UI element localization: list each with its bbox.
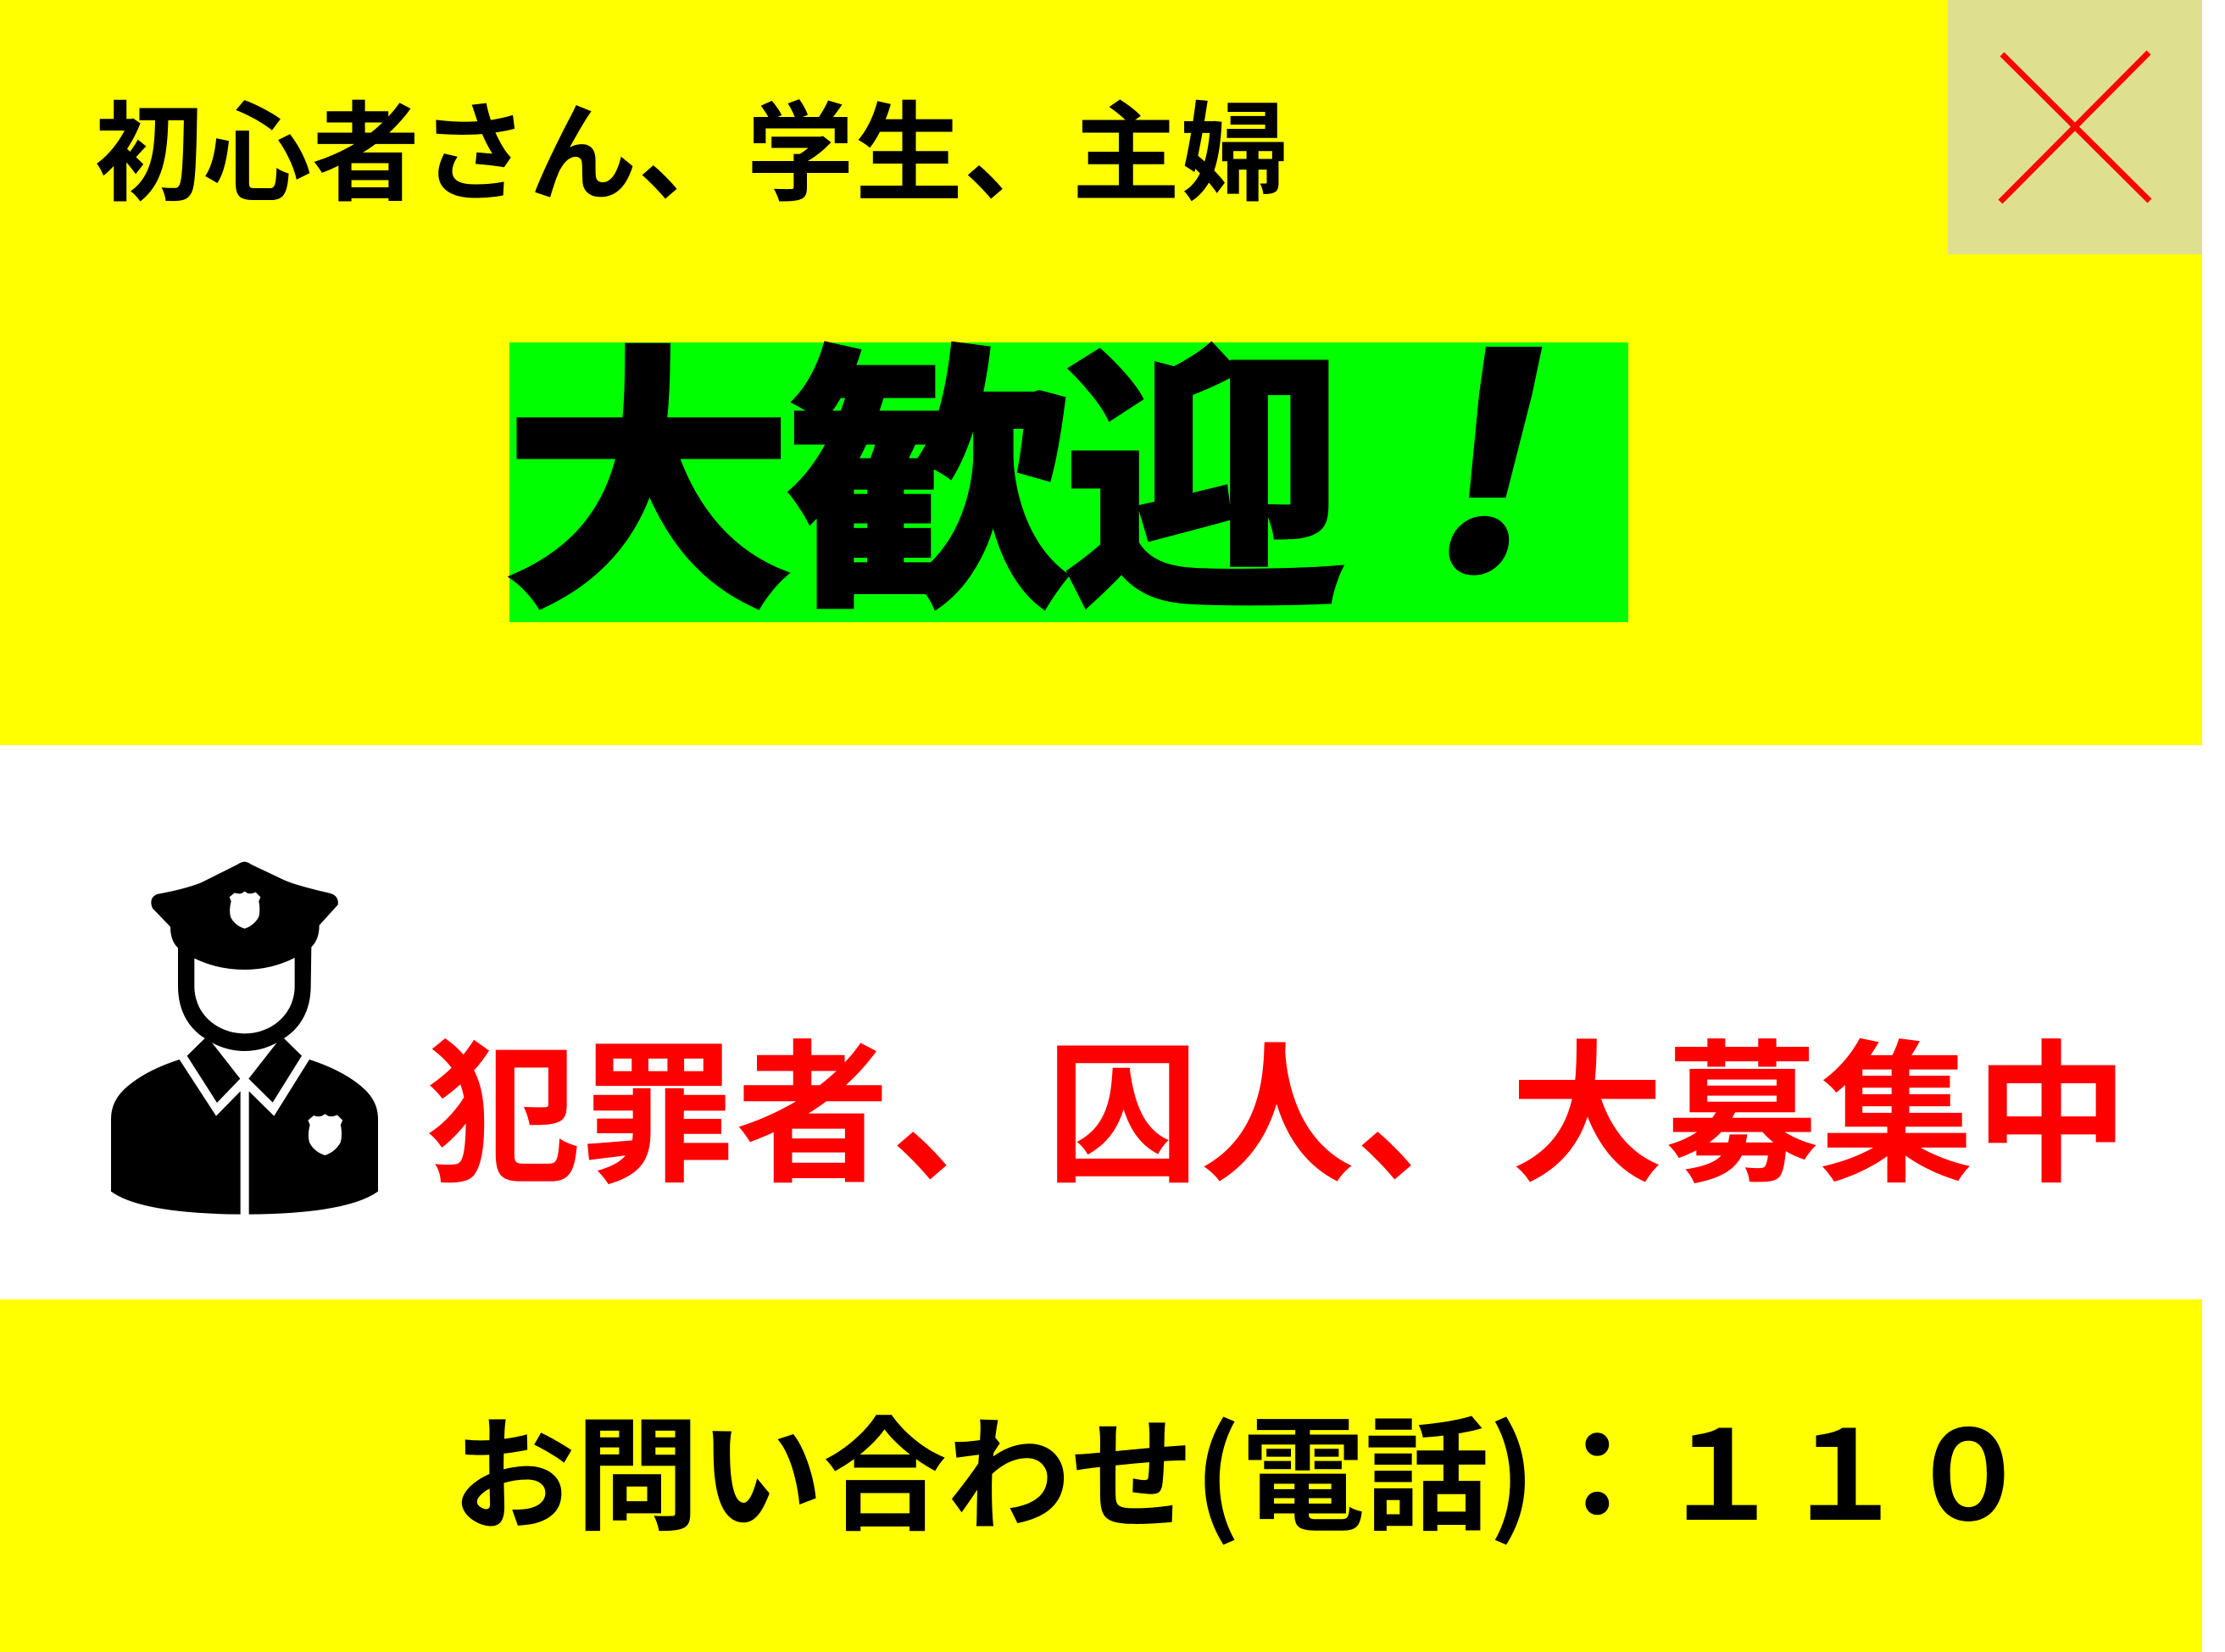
heading: target audience: 初心者さん、学生、主婦 [95,67,1289,223]
highlight: big welcome: 迎 [1065,261,1344,662]
icon: police officer [111,862,378,1215]
highlight: big welcome: 大 [504,260,793,661]
close button [1948,0,2202,254]
red recruitment headline: 犯罪者、囚人、大募集中 [426,992,2130,1214]
highlight: big welcome: 歓 [788,259,1071,660]
panel: bottom yellow contact band [0,1299,2202,1652]
panel: top yellow banner [0,0,2202,745]
highlight: big welcome [504,231,1680,662]
highlight: big welcome: ！ [1315,231,1680,653]
contact phone line: お問い合わせ(電話)：１１０ [452,1377,2030,1556]
